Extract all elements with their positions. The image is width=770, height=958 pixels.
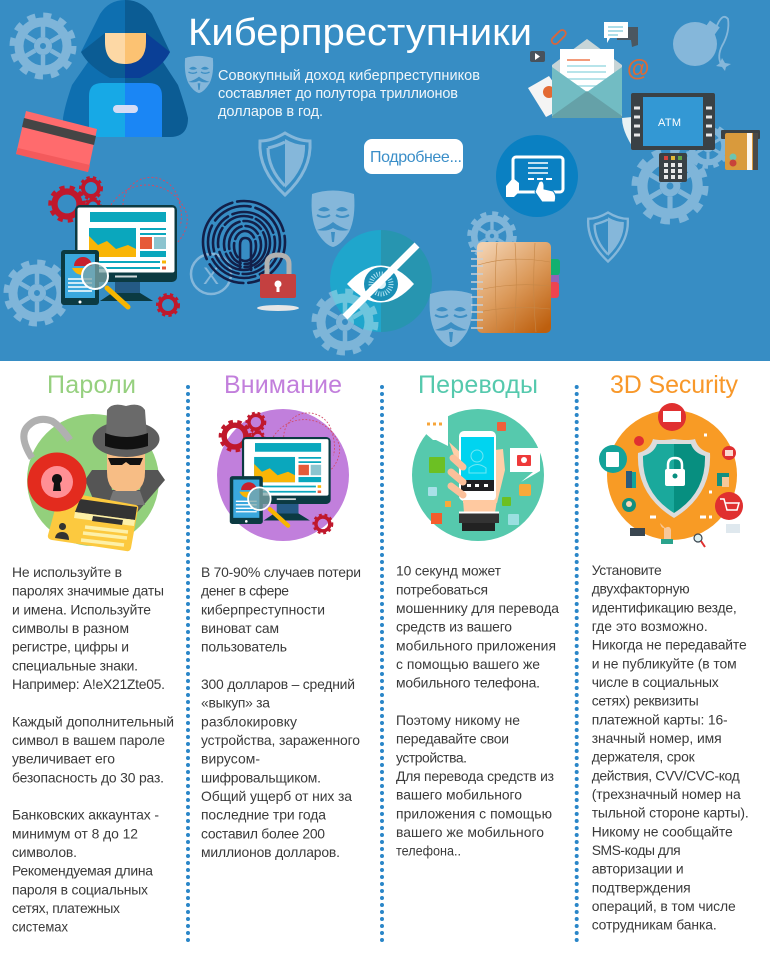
text block: passwords: Рекомендуемая длина bbox=[12, 863, 153, 879]
text block: transfers: вашего же мобильного bbox=[396, 824, 544, 840]
text block: subtitle: Совокупный доход киберпреступников bbox=[218, 68, 480, 84]
text block: transfers: мошеннику для перевода bbox=[396, 600, 559, 616]
text block: attention: составил более 200 bbox=[201, 825, 325, 841]
text block: 3D Security bbox=[592, 562, 749, 933]
text block: 3D Security: сотрудникам банка. bbox=[592, 917, 717, 933]
icon: paper clip bbox=[550, 29, 567, 45]
panel: transfers bbox=[396, 371, 559, 859]
text block: passwords: и имена. Используйте bbox=[12, 601, 151, 617]
text block: passwords: минимум от 8 до 12 bbox=[12, 825, 138, 841]
icon: crossed-out eye bbox=[314, 230, 432, 352]
title: Киберпреступники bbox=[188, 12, 532, 54]
text block: transfers: приложения с помощью bbox=[396, 805, 552, 821]
text block: attention: устройства, зараженного bbox=[201, 732, 360, 748]
panel: passwords bbox=[12, 371, 174, 935]
icon: spy with lock and card bbox=[24, 405, 165, 551]
panel: 3D Security bbox=[592, 371, 749, 933]
icon: large mask bbox=[312, 190, 354, 247]
icon: envelope with letter bbox=[528, 39, 622, 118]
text block: passwords: символ в вашем пароле bbox=[12, 732, 165, 748]
text block: attention: шифровальщиком. bbox=[201, 769, 321, 785]
text block: 3D Security: Установите bbox=[592, 562, 662, 578]
icon: video player bbox=[530, 51, 545, 62]
icon: inserted bank card bbox=[721, 130, 760, 170]
heading: 3D Security: 3D Security bbox=[610, 371, 738, 399]
text block: attention: «выкуп» за bbox=[201, 695, 270, 711]
text block: attention: пользователь bbox=[201, 639, 287, 655]
text block: passwords: регистре, цифры и bbox=[12, 639, 129, 655]
text block: attention: 300 долларов – средний bbox=[201, 676, 355, 692]
text block: attention: последние три года bbox=[201, 807, 326, 823]
text block: attention: киберпреступности bbox=[201, 601, 325, 617]
heading: transfers: Переводы bbox=[418, 371, 538, 399]
text block: passwords: системах bbox=[12, 919, 68, 935]
text block: 3D Security: и не публикуйте (в том bbox=[592, 655, 737, 671]
text block: transfers: мобильного телефона. bbox=[396, 675, 540, 691]
icon: hooded hacker bbox=[63, 0, 188, 137]
text block: 3D Security: сетях) реквизиты bbox=[592, 693, 699, 709]
icon: mask over notebook bbox=[430, 290, 472, 347]
text block: 3D Security: тыльной стороне карты). bbox=[592, 805, 749, 821]
text block: passwords: Например: A!eX21Zte05. bbox=[12, 676, 165, 692]
text block: passwords: Банковских аккаунтах - bbox=[12, 807, 159, 823]
heading: attention: Внимание bbox=[224, 371, 342, 399]
icon: shield with lock on orange circle bbox=[599, 403, 743, 547]
icon: ATM machine: ATM bbox=[658, 117, 681, 129]
text block: subtitle: долларов в год. bbox=[218, 104, 323, 120]
icon: fingerprint with padlock: X bbox=[203, 263, 219, 290]
text block: 3D Security: подтверждения bbox=[592, 879, 691, 895]
text block: attention: миллионов долларов. bbox=[201, 844, 340, 860]
text block: 3D Security: числе в социальных bbox=[592, 674, 719, 690]
text block: passwords: специальные знаки. bbox=[12, 657, 138, 673]
icon: hand holding phone bbox=[412, 409, 544, 541]
text block: 3D Security: операций, в том числе bbox=[592, 898, 736, 914]
icon: shield left bbox=[260, 133, 310, 195]
text block: attention: Общий ущерб от них за bbox=[201, 788, 352, 804]
text block: 3D Security: где это возможно. bbox=[592, 618, 708, 634]
text block: passwords bbox=[12, 564, 174, 935]
icon: leather notebook bbox=[471, 242, 560, 333]
text block: transfers: Для перевода средств из bbox=[396, 768, 554, 784]
panel: header banner bbox=[0, 0, 770, 361]
text block: attention: виноват сам bbox=[201, 620, 279, 636]
icon: ATM machine bbox=[622, 93, 715, 182]
text block: 3D Security: идентификацию везде, bbox=[592, 599, 737, 615]
text block: 3D Security: авторизации и bbox=[592, 861, 684, 877]
text block: transfers: передавайте свои bbox=[396, 731, 509, 747]
text block: transfers: мобильного приложения bbox=[396, 637, 556, 653]
text block: passwords: увеличивает его bbox=[12, 751, 115, 767]
button: more: Подробнее... bbox=[370, 149, 462, 166]
text block: passwords: символов. bbox=[12, 844, 77, 860]
text block: passwords: Не используйте в bbox=[12, 564, 122, 580]
text block: transfers: вашего мобильного bbox=[396, 787, 522, 803]
text block: 3D Security: (трехзначный номер на bbox=[592, 786, 741, 802]
button: more bbox=[364, 139, 463, 174]
text block: 3D Security: SMS-коды для bbox=[592, 842, 681, 858]
icon: at sign: @ bbox=[627, 55, 649, 81]
text block: transfers bbox=[396, 563, 559, 859]
text block: passwords: паролях значимые даты bbox=[12, 583, 164, 599]
text block: transfers: устройства. bbox=[396, 749, 467, 765]
icon: bomb bbox=[673, 17, 731, 71]
text block: transfers: 10 секунд может bbox=[396, 563, 502, 579]
heading: passwords: Пароли bbox=[47, 371, 136, 399]
text block: passwords: сетях, платежных bbox=[12, 900, 120, 916]
text block: attention bbox=[201, 564, 361, 860]
icon: chat bubbles bbox=[604, 22, 638, 47]
text block: transfers: потребоваться bbox=[396, 581, 488, 597]
text block: subtitle: составляет до полутора триллионов bbox=[218, 86, 458, 102]
icons: background gears bbox=[6, 16, 729, 324]
text block: 3D Security: двухфакторную bbox=[592, 581, 690, 597]
text block: transfers: средств из вашего bbox=[396, 619, 512, 635]
text block: transfers: телефона.. bbox=[396, 843, 461, 859]
text block: passwords: пароля в социальных bbox=[12, 881, 148, 897]
icon: red bank card bbox=[16, 111, 97, 172]
icon: monitor on purple circle bbox=[217, 409, 349, 541]
icon: monitor with charts bbox=[51, 177, 187, 315]
text block: passwords: безопасность до 30 раз. bbox=[12, 769, 164, 785]
text block: 3D Security: платежной карты: 16- bbox=[592, 711, 728, 727]
text block: 3D Security: значный номер, имя bbox=[592, 730, 722, 746]
text block: attention: разблокировку bbox=[201, 713, 297, 729]
text block: transfers: с помощью вашего же bbox=[396, 656, 540, 672]
icon: small mask bbox=[185, 56, 213, 93]
icon: tablet in blue circle bbox=[496, 135, 578, 217]
text block: 3D Security: держателя, срок bbox=[592, 749, 696, 765]
text block: 3D Security: Никому не сообщайте bbox=[592, 823, 733, 839]
text block: passwords: Каждый дополнительный bbox=[12, 713, 174, 729]
text block: transfers: Поэтому никому не bbox=[396, 712, 520, 728]
icon: fingerprint with padlock bbox=[191, 201, 299, 311]
dotted column dividers bbox=[188, 387, 577, 941]
text block: subtitle bbox=[218, 68, 480, 120]
text block: attention: денег в сфере bbox=[201, 583, 289, 599]
text block: 3D Security: Никогда не передавайте bbox=[592, 637, 747, 653]
panel: attention bbox=[201, 371, 361, 860]
text block: passwords: символы в разном bbox=[12, 620, 129, 636]
text block: attention: В 70-90% случаев потери bbox=[201, 564, 361, 580]
text block: 3D Security: действия, CVV/CVC-код bbox=[592, 767, 740, 783]
text block: attention: вирусом- bbox=[201, 751, 260, 767]
icon: shield right bbox=[588, 213, 628, 261]
